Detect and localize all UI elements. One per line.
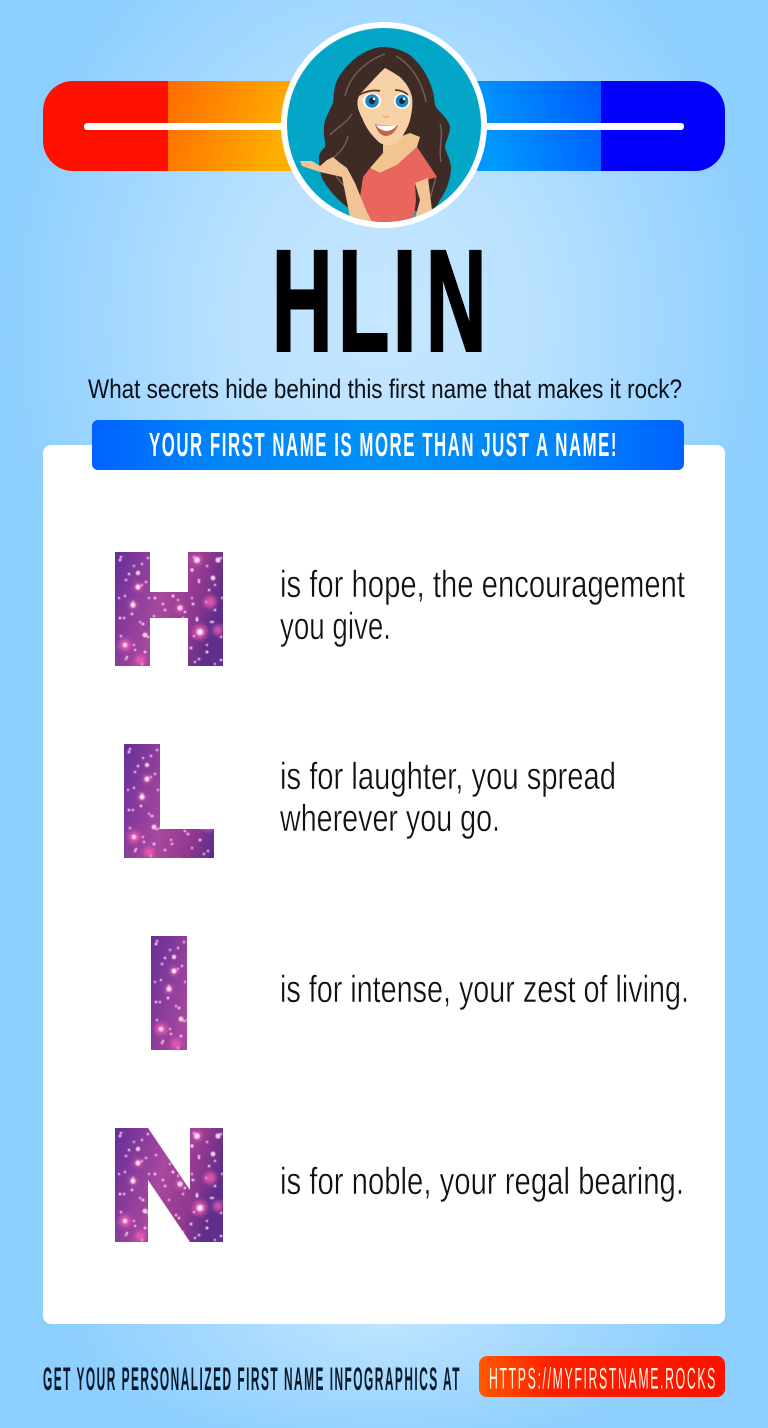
title: HLIN: [272, 220, 486, 381]
hair highlights: [330, 54, 441, 198]
teeth: [376, 125, 397, 131]
right arm: [415, 178, 432, 217]
text: H line: [280, 564, 685, 648]
text: L line: is for laughter, you spread: [280, 756, 616, 798]
text: L line: wherever you go.: [279, 798, 500, 840]
letter N: [115, 1128, 223, 1242]
nose: [383, 116, 389, 118]
eyebrows: [359, 90, 408, 95]
banner: [92, 420, 684, 470]
header colour bar: [43, 81, 725, 171]
neck and chest: [370, 133, 420, 173]
portrait: cartoon woman in circle: [281, 22, 487, 228]
face: [357, 68, 412, 145]
letter H: [115, 552, 223, 666]
right eye: [394, 93, 410, 109]
letter L: [124, 744, 214, 858]
left eye: [363, 93, 381, 109]
letter I: [151, 936, 187, 1050]
text: H line: you give.: [280, 606, 391, 648]
content panel: [43, 445, 725, 1324]
hair: [319, 47, 451, 212]
footer URL button: [479, 1356, 725, 1397]
text: L line: [279, 756, 616, 840]
raised arm and hand: [300, 157, 374, 226]
shirt: [360, 147, 437, 226]
mouth: [375, 124, 398, 136]
